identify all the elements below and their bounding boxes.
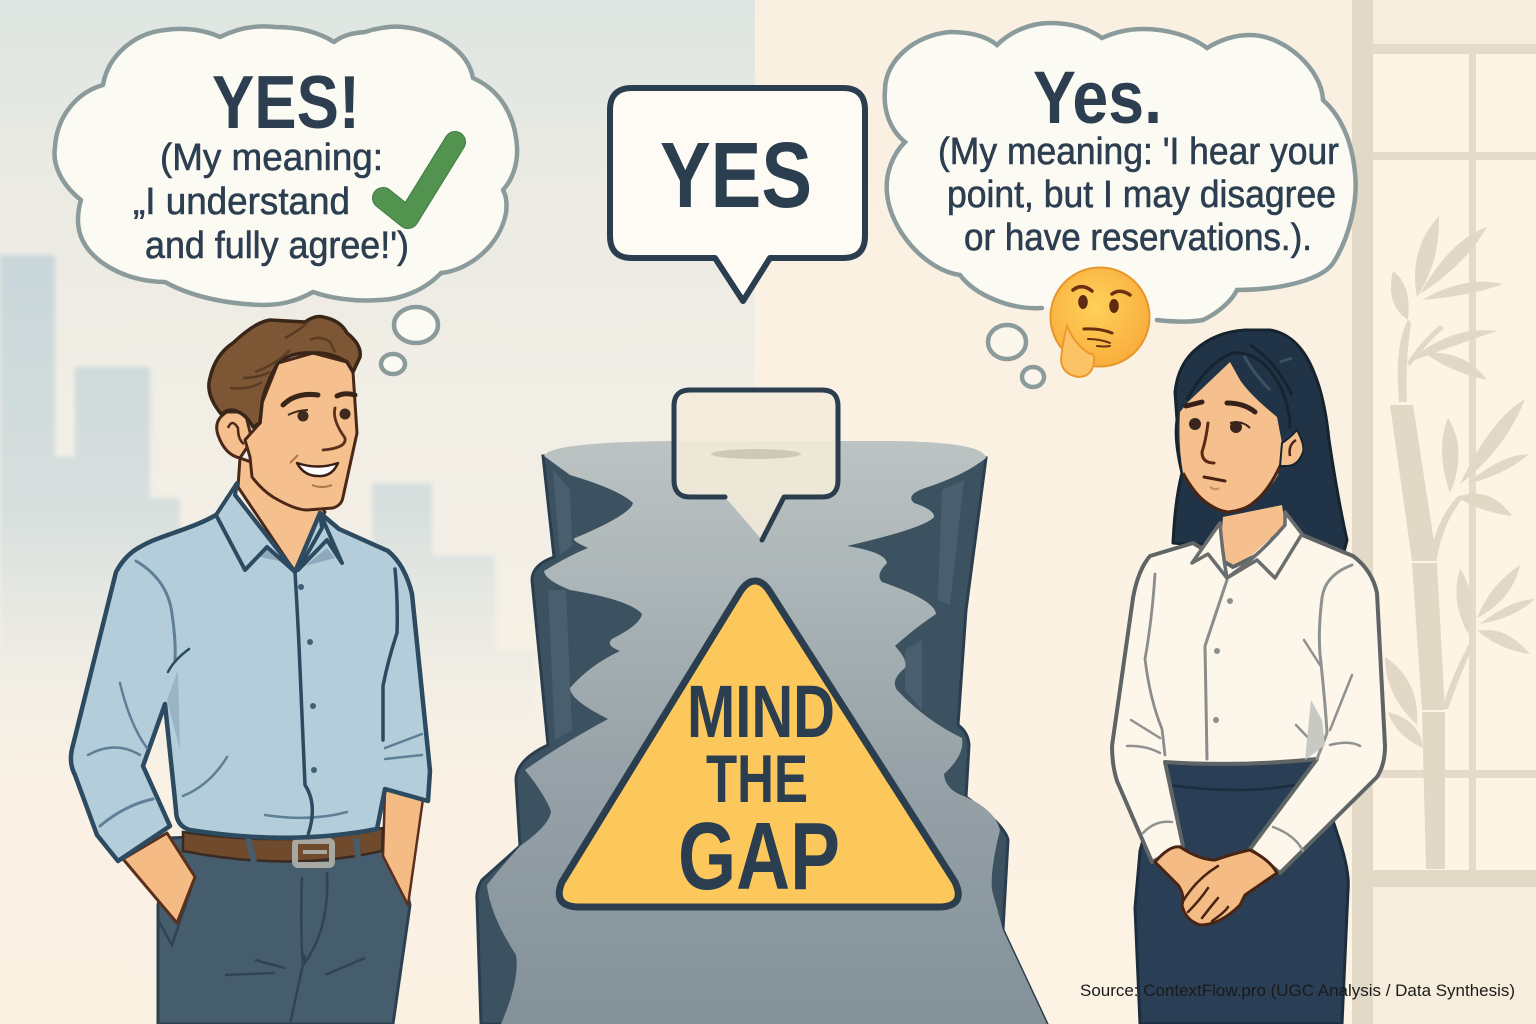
right thought bubble: Yes. (1033, 56, 1162, 139)
warning sign: mind the gap (559, 581, 958, 910)
central speech bubble: YES (610, 88, 865, 301)
icon: thinking face emoji (1050, 268, 1150, 377)
bamboo plant (1385, 216, 1535, 869)
illustration: the gap chasm (477, 441, 1047, 1024)
man eyes (298, 410, 308, 422)
city skyline silhouette (0, 255, 535, 815)
woman hair strands (1187, 345, 1292, 428)
man neck (238, 458, 325, 572)
man ear (217, 412, 252, 458)
man brows (283, 394, 355, 405)
woman mouth (1204, 477, 1225, 481)
man face (245, 353, 357, 510)
left thought bubble: „I understand (133, 181, 350, 223)
warning sign: mind the gap: THE (706, 741, 808, 817)
woman brows (1186, 402, 1255, 412)
man shirt (71, 495, 430, 861)
left thought bubble: and fully agree!') (145, 225, 409, 267)
woman eyes (1189, 418, 1201, 430)
right thought bubble (885, 23, 1356, 322)
man left hand (123, 833, 195, 923)
character: thoughtful woman (1112, 330, 1385, 1024)
man belt (183, 828, 383, 866)
man collar (216, 483, 295, 572)
woman skirt (1135, 759, 1348, 1024)
man nose (323, 408, 345, 450)
left thought bubble: (My meaning: (160, 137, 383, 179)
woman blouse torso and arms (1112, 534, 1385, 873)
left thought bubble: YES! (212, 60, 360, 144)
man hair (209, 317, 360, 427)
man right hand (383, 789, 423, 905)
woman collar (1192, 523, 1227, 578)
woman ear (1280, 430, 1303, 466)
man mouth (297, 463, 338, 476)
warning sign: mind the gap: MIND (687, 670, 835, 753)
right thought bubble: (My meaning: 'I hear your (938, 131, 1339, 173)
woman blouse details (1127, 565, 1360, 851)
left thought dots (381, 307, 438, 374)
character: smiling man (71, 317, 430, 1024)
woman clasped hands (1155, 847, 1277, 925)
central speech bubble: YES: YES (660, 123, 812, 227)
warning sign: mind the gap: GAP (678, 803, 840, 910)
source caption: Source: ContextFlow.pro (UGC Analysis / Data Synthesis) (1080, 981, 1515, 1000)
right thought bubble: or have reservations.). (964, 217, 1312, 259)
man trousers (158, 829, 410, 1024)
icon: green check mark (383, 142, 455, 218)
right thought bubble: point, but I may disagree (947, 174, 1336, 216)
woman neck (1221, 505, 1285, 575)
man shirt details (88, 561, 422, 826)
woman nose (1202, 423, 1214, 463)
right thought dots (988, 325, 1044, 387)
faded empty speech bubble over the gap (674, 390, 838, 540)
woman hair back (1173, 330, 1347, 552)
woman face (1179, 362, 1282, 512)
left thought bubble (54, 26, 517, 305)
